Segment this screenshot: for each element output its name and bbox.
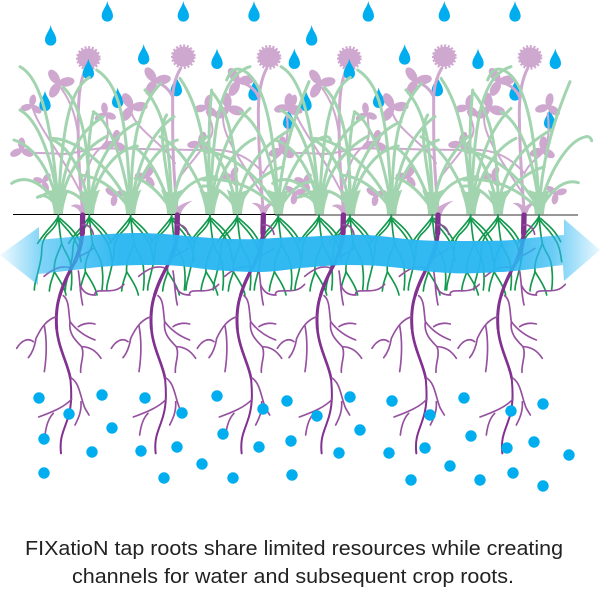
arrow: shared water flow through soil <box>0 219 600 285</box>
caption <box>25 538 563 588</box>
root systems: green fibrous roots and purple tap roots <box>17 215 565 453</box>
clover plants <box>9 46 569 215</box>
soil surface line <box>13 214 578 216</box>
caption: FIXatioN tap roots share limited resources while creating <box>25 538 563 560</box>
caption: channels for water and subsequent crop roots. <box>72 566 514 588</box>
water drops above and behind plants <box>39 1 561 129</box>
grass plants <box>12 67 592 214</box>
groundwater dots <box>33 389 575 492</box>
drops falling over clover heads <box>83 59 355 79</box>
